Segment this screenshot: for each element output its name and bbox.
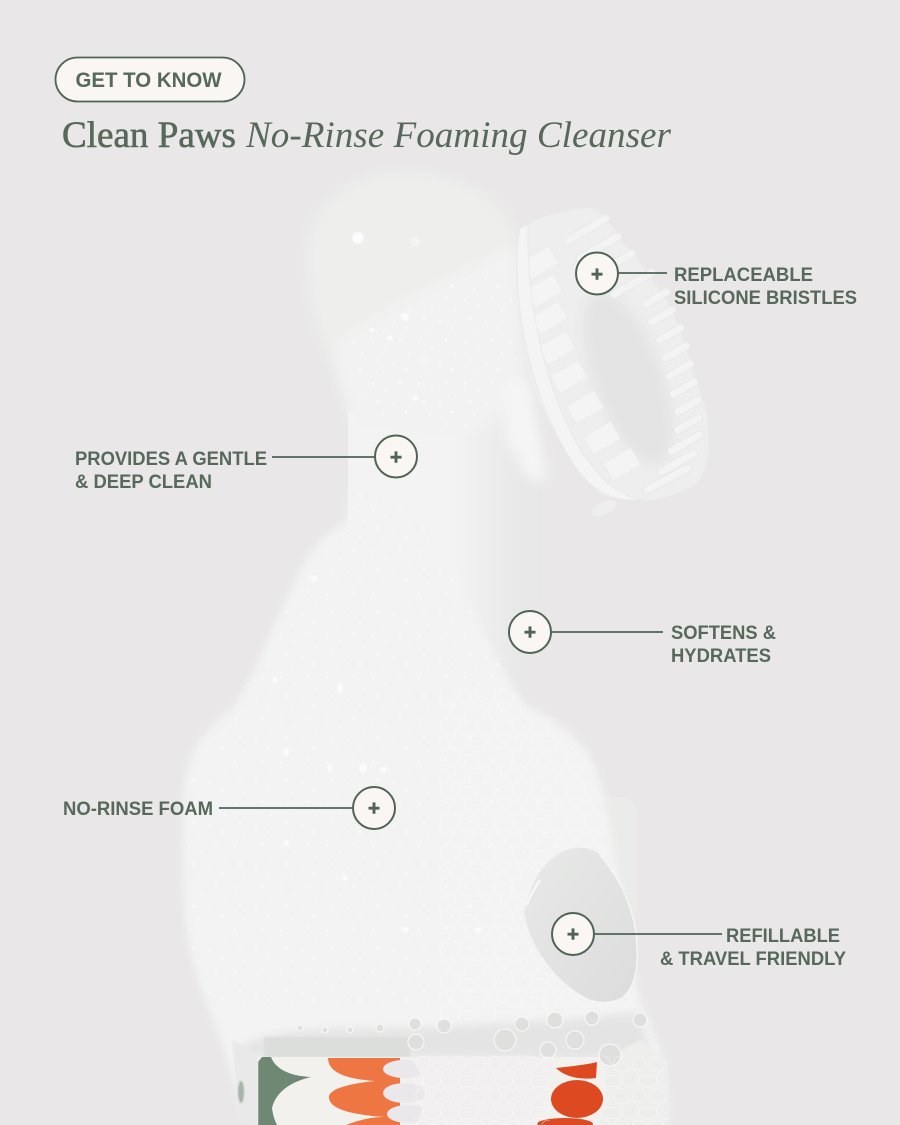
head micro bubbles [345,258,518,428]
callout: provides a gentle and deep clean: & DEEP CLEAN [75,472,212,493]
callout: refillable and travel friendly [552,913,846,970]
foam on the head [336,250,524,437]
brush drip tab [588,496,620,520]
brush connector [505,380,548,480]
refill lens window [524,848,637,1002]
bottle label with floral pattern [258,1057,603,1125]
callout: provides a gentle and deep clean: PROVIDES A GENTLE [75,449,267,470]
foam collar shadow band [236,1012,650,1060]
pump tab behind foam [598,797,636,1000]
callout: replaceable silicone bristles: + [591,263,603,286]
title: Clean Paws [62,115,236,156]
foam left of label [232,1040,258,1125]
callout: refillable and travel friendly: + [567,923,579,946]
callout: softens and hydrates: HYDRATES [671,646,771,667]
bristles [516,208,709,500]
callout: no-rinse foam: NO-RINSE FOAM [63,799,213,820]
bottle head dome [306,172,528,420]
foam over bottle label [410,1056,553,1125]
badge: get to know [56,58,244,102]
bristle pins [562,213,705,495]
brush base plate [517,224,642,500]
foam mass [182,490,669,1125]
callout: softens and hydrates: SOFTENS & [671,623,776,644]
callout: replaceable silicone bristles [576,252,857,309]
bristle shadow core [565,280,691,476]
callout: provides a gentle and deep clean: + [390,446,402,469]
foaming bottle illustration [180,172,709,1125]
callout: replaceable silicone bristles: REPLACEABLE [674,265,813,286]
bottle neck [348,410,542,600]
callout: no-rinse foam: + [368,797,380,820]
collar bubble band [297,1011,647,1066]
title: No-Rinse Foaming Cleanser [245,115,672,156]
foam right of label [600,1040,668,1125]
silicone brush head [505,208,709,520]
head and foam highlights [272,232,481,933]
callout: refillable and travel friendly: & TRAVEL FRIENDLY [660,949,846,970]
glass band above label [264,1037,410,1057]
callout: softens and hydrates: + [524,621,536,644]
callout: softens and hydrates [509,611,776,667]
bottle lower neck [348,598,528,713]
foam cell lace over label [415,1056,620,1125]
callout: no-rinse foam [63,787,395,829]
badge: get to know: GET TO KNOW [76,69,222,92]
foam micro bubbles [240,684,248,697]
callout: refillable and travel friendly: REFILLABLE [726,926,840,947]
callout: replaceable silicone bristles: SILICONE BRISTLES [674,288,857,309]
callout: provides a gentle and deep clean [75,436,417,493]
green smudge at left of label [238,1081,244,1103]
bristle blocks [521,246,641,481]
